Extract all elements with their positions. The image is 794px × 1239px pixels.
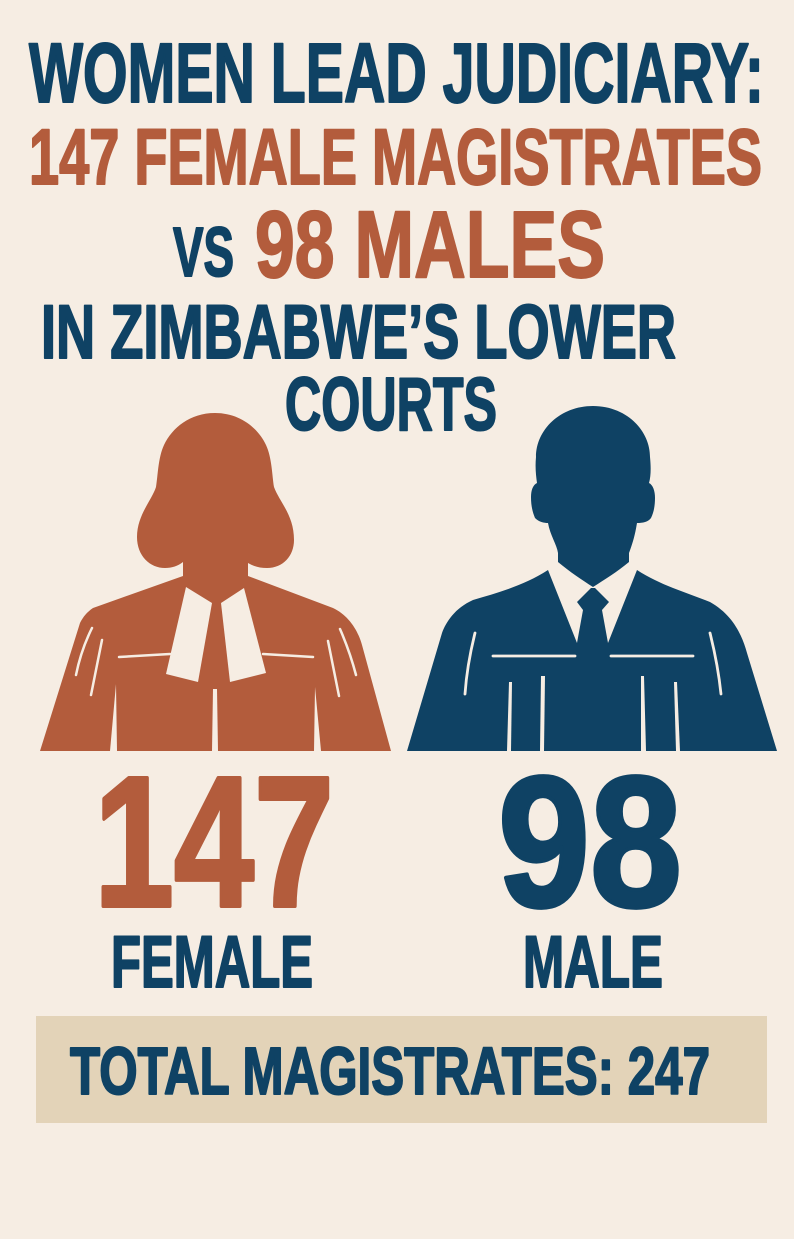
number 147: 147 (94, 739, 334, 946)
label male: MALE (523, 922, 663, 1003)
number 98: 98 (498, 739, 682, 946)
stat: male count (498, 739, 682, 1003)
title line 3: 98 males: 98 MALES (255, 192, 605, 298)
icon: male magistrate silhouette (407, 406, 777, 751)
stat: female count (94, 739, 334, 1003)
title (29, 26, 764, 446)
robe folds (76, 628, 356, 696)
total banner (36, 1016, 767, 1123)
label female: FEMALE (111, 922, 313, 1003)
gown folds (465, 633, 721, 694)
title line 3: vs: VS (173, 213, 234, 291)
collar bands (166, 587, 266, 682)
icon: female magistrate silhouette (40, 413, 391, 751)
title line 5: COURTS (285, 362, 497, 446)
